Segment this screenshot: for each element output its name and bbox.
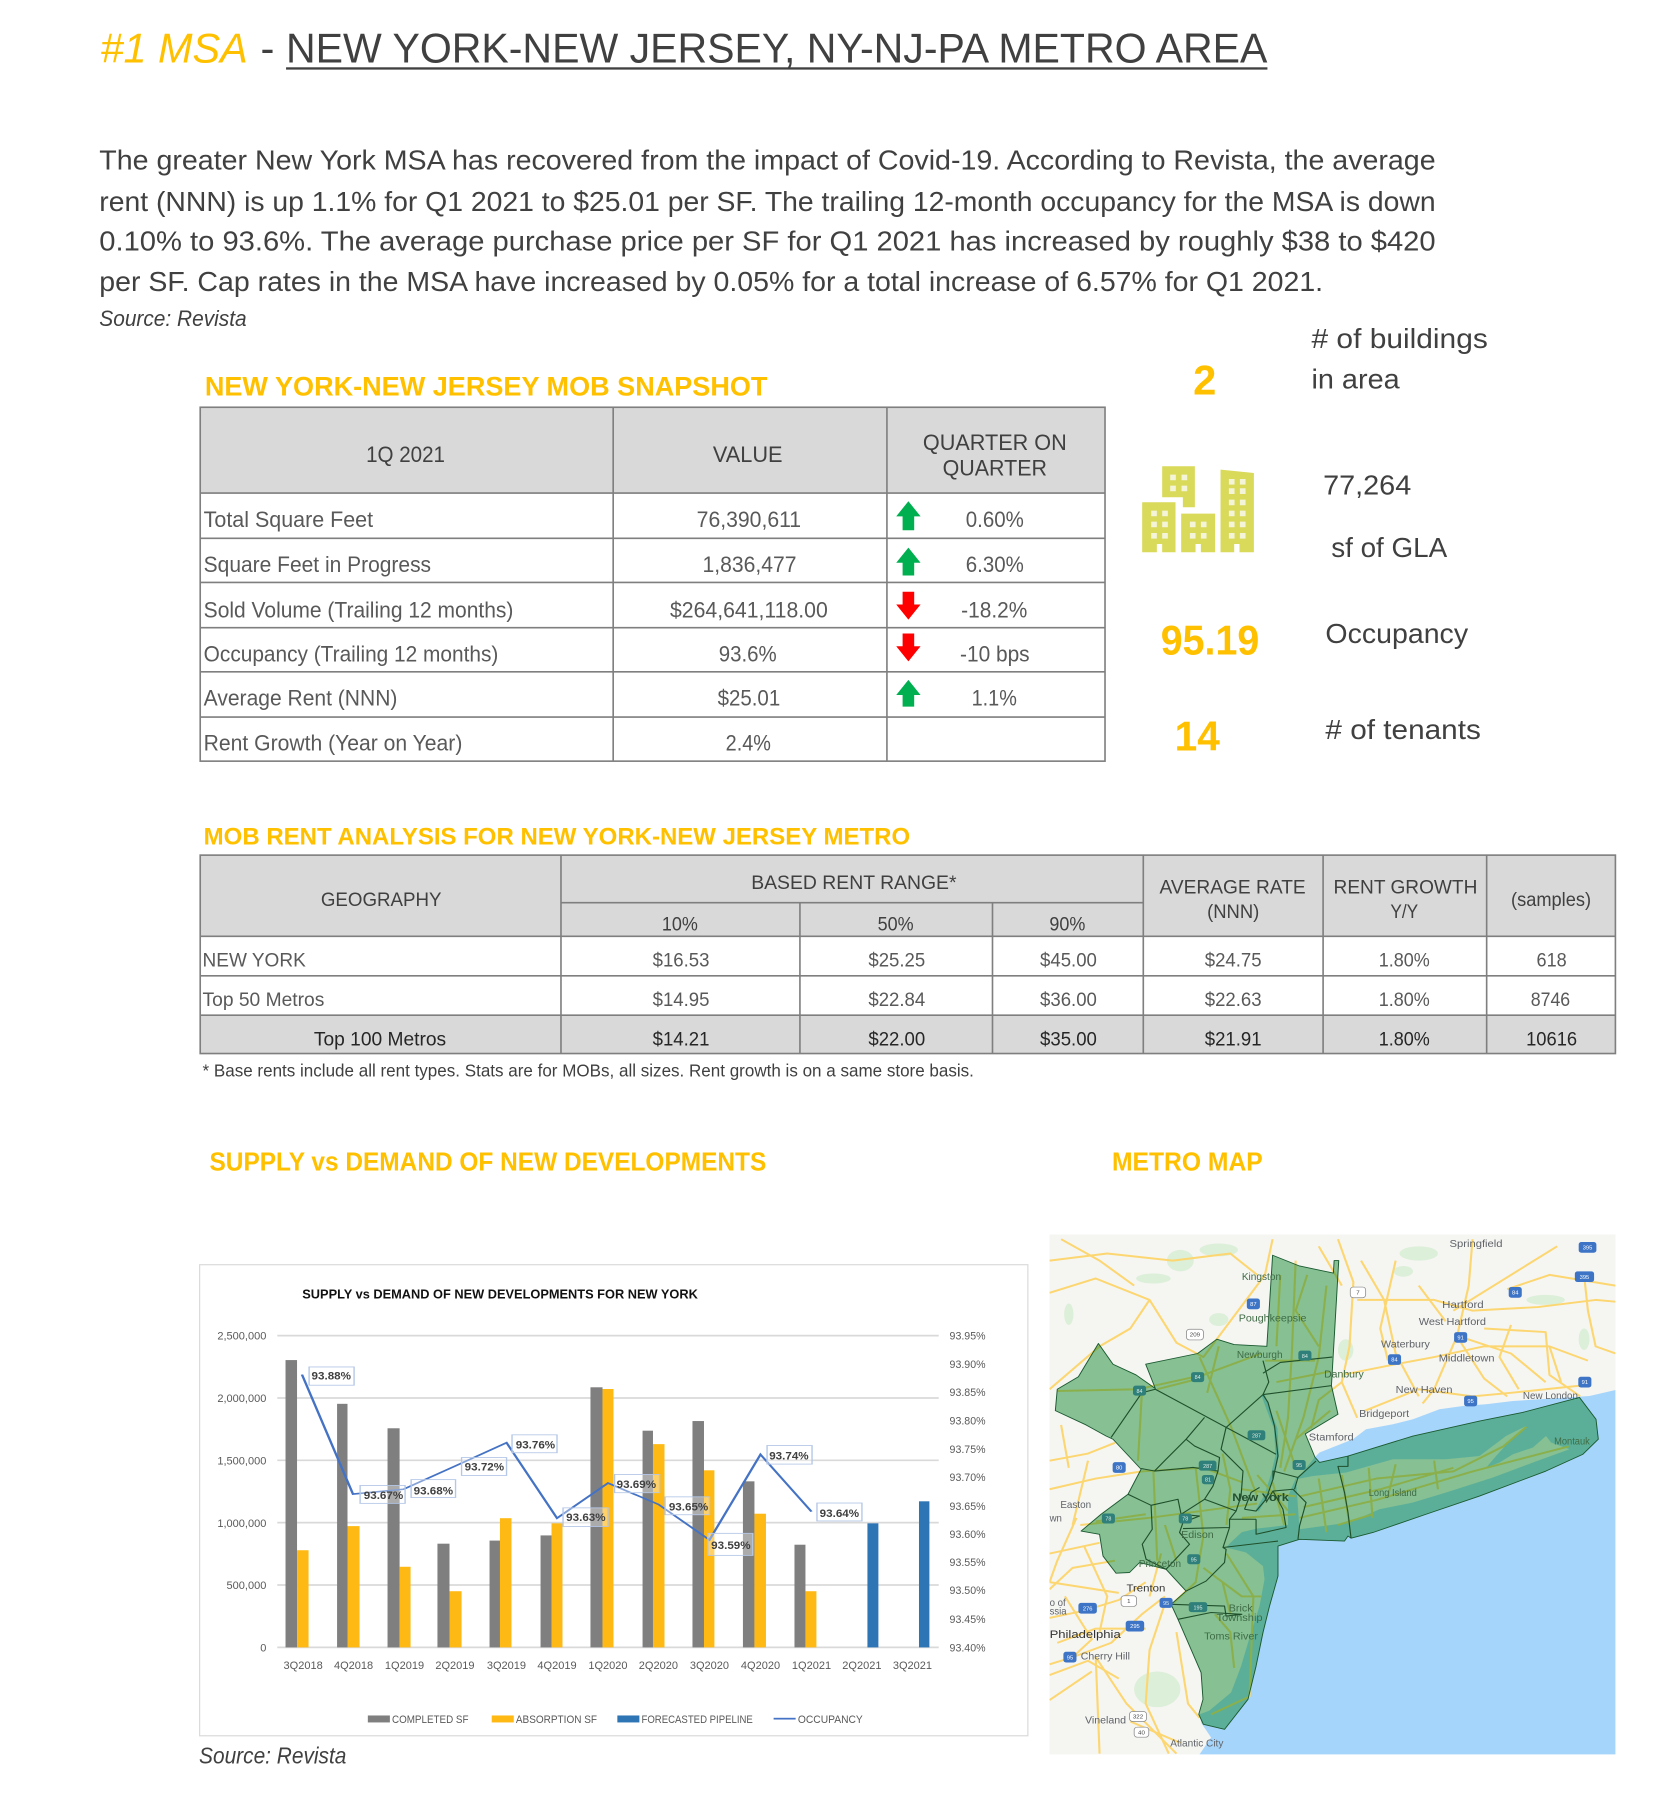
map labels outside the metro area (1049, 1239, 1578, 1749)
metro shields: 84 (1137, 1389, 1143, 1395)
icon: up arrow average rent (896, 680, 921, 707)
metro labels: Newburgh (1237, 1350, 1283, 1361)
metro map (1049, 1232, 1619, 1757)
rent analysis table: $24.75 (1205, 950, 1262, 972)
right axis labels: 93.45% (950, 1614, 986, 1626)
snapshot table: 1Q 2021 (366, 442, 445, 467)
metro labels: Poughkeepsie (1239, 1314, 1307, 1324)
occupancy data labels: 93.67% (364, 1490, 403, 1502)
map labels outside the metro area: Easton (1060, 1500, 1091, 1511)
stat: tenants: 14 (1175, 713, 1220, 760)
heading: snapshot: NEW YORK-NEW JERSEY MOB SNAPSHOT (205, 372, 767, 402)
heading: metro map: METRO MAP (1112, 1149, 1263, 1177)
rent analysis table: RENT GROWTH (1334, 876, 1477, 898)
icon: up arrow square feet in progress (896, 548, 921, 575)
map labels outside the metro area: West Hartford (1419, 1317, 1486, 1328)
metro labels: Edison (1181, 1530, 1214, 1541)
heading: rent analysis: MOB RENT ANALYSIS FOR NEW YORK-NEW JERSEY METRO (204, 824, 910, 851)
rent analysis table: 618 (1537, 950, 1567, 972)
right axis labels: 93.50% (950, 1585, 986, 1597)
stat: occupancy: 95.19 (1161, 616, 1259, 663)
metro shields: 287 (1203, 1464, 1212, 1470)
stat: occupancy (1161, 616, 1468, 663)
left axis labels: 1,500,000 (217, 1455, 266, 1467)
intro paragraph (99, 144, 1436, 297)
metro labels: Princeton (1139, 1559, 1181, 1570)
rent analysis table: 1.80% (1379, 1028, 1430, 1050)
right axis labels: 93.85% (950, 1387, 986, 1399)
metro county boundaries (1111, 1357, 1351, 1619)
rent analysis table: NEW YORK (203, 950, 306, 972)
snapshot table: 93.6% (719, 641, 777, 666)
stat: buildings (1193, 323, 1488, 403)
stat: GLA: 77,264 (1323, 469, 1411, 500)
icon: up arrow total square feet (896, 501, 921, 530)
snapshot table: $264,641,118.00 (670, 597, 828, 622)
map labels outside the metro area: ssia (1050, 1607, 1067, 1617)
icon: buildings (1142, 466, 1254, 552)
snapshot table: QUARTER ON (923, 430, 1067, 455)
intro paragraph: rent (NNN) is up 1.1% for Q1 2021 to $25.01 per SF. The trailing 12-month occupancy for the MSA is down (99, 186, 1436, 217)
rent analysis table: 90% (1049, 914, 1085, 936)
map shields: interstate markers: 1 (1127, 1599, 1130, 1605)
metro labels: Kingston (1242, 1272, 1281, 1283)
rent analysis table: BASED RENT RANGE* (751, 872, 957, 894)
metro shields: 84 (1195, 1375, 1201, 1381)
rent analysis table: Top 50 Metros (203, 989, 324, 1011)
chart title: SUPPLY vs DEMAND OF NEW DEVELOPMENTS FOR NEW YORK (302, 1286, 699, 1301)
snapshot table: Square Feet in Progress (204, 552, 431, 577)
metro shields: 95 (1191, 1558, 1197, 1563)
stat: tenants: # of tenants (1325, 714, 1481, 745)
snapshot table: Rent Growth (Year on Year) (204, 731, 462, 756)
metro shields: 78 (1182, 1517, 1188, 1523)
title: NEW YORK-NEW JERSEY, NY-NJ-PA METRO AREA (286, 25, 1268, 72)
map labels outside the metro area: Waterbury (1381, 1340, 1431, 1350)
chart legend: ABSORPTION SF (516, 1714, 597, 1726)
snapshot table: Total Square Feet (204, 507, 373, 532)
map labels outside the metro area: Cherry Hill (1081, 1652, 1130, 1663)
rent analysis table: $16.53 (653, 950, 709, 972)
occupancy data labels: 93.63% (566, 1512, 606, 1524)
intro paragraph: per SF. Cap rates in the MSA have increased by 0.05% for a total increase of 6.57% for Q1 2021. (99, 266, 1323, 297)
map labels outside the metro area: Springfield (1449, 1239, 1503, 1250)
stat: buildings: 2 (1193, 356, 1216, 403)
stat: buildings: in area (1311, 364, 1400, 395)
metro shields: 287 (1252, 1434, 1261, 1439)
metro roads (1265, 1261, 1330, 1471)
metro shields: 195 (1194, 1605, 1203, 1611)
metro labels: Long Island (1369, 1488, 1417, 1499)
right axis labels: 93.55% (950, 1557, 986, 1569)
chart legend: OCCUPANCY (798, 1714, 863, 1726)
rent analysis table: (samples) (1511, 889, 1591, 911)
map roads (1050, 1239, 1616, 1754)
left axis labels: 0 (260, 1643, 266, 1655)
stat: GLA: sf of GLA (1331, 532, 1448, 563)
metro labels: Montauk (1554, 1437, 1591, 1447)
rent analysis table: $36.00 (1040, 989, 1097, 1011)
rent analysis table: $21.91 (1205, 1028, 1262, 1050)
occupancy data labels: 93.59% (711, 1540, 751, 1552)
intro paragraph: 0.10% to 93.6%. The average purchase price per SF for Q1 2021 has increased by roughly $38 to $420 (99, 226, 1436, 257)
right axis labels: 93.80% (950, 1415, 986, 1427)
plot: gridlines and bars (277, 1336, 939, 1647)
map labels outside the metro area: Bridgeport (1359, 1409, 1409, 1420)
x axis labels: 4Q2018 (334, 1660, 373, 1672)
right axis labels: 93.70% (950, 1472, 986, 1484)
metro shields: 81 (1205, 1478, 1211, 1483)
x axis labels: 1Q2020 (588, 1660, 628, 1672)
map shields: interstate markers: 209 (1190, 1333, 1201, 1339)
map labels outside the metro area: New Haven (1396, 1385, 1453, 1396)
heading: supply vs demand: SUPPLY vs DEMAND OF NEW DEVELOPMENTS (209, 1149, 766, 1177)
map shields: interstate markers: 7 (1356, 1291, 1360, 1296)
x axis labels: 2Q2021 (842, 1660, 881, 1672)
metro shields: 84 (1302, 1354, 1308, 1360)
map labels outside the metro area: Atlantic City (1170, 1739, 1224, 1749)
metro labels: New York (1232, 1490, 1289, 1504)
snapshot table: 6.30% (966, 552, 1024, 577)
title: - (261, 25, 274, 72)
rent analysis table: $22.63 (1205, 989, 1262, 1011)
metro labels: Township (1216, 1613, 1263, 1624)
rent analysis table: $35.00 (1040, 1028, 1097, 1050)
x axis labels: 2Q2020 (639, 1660, 678, 1672)
metro labels (1139, 1272, 1591, 1642)
rent analysis table: $22.00 (868, 1028, 925, 1050)
snapshot table: $25.01 (718, 685, 780, 710)
chart legend: FORECASTED PIPELINE (641, 1714, 753, 1726)
map labels outside the metro area: wn (1049, 1514, 1062, 1524)
map shields: interstate markers: 395 (1583, 1246, 1592, 1251)
stat: GLA (1323, 469, 1448, 563)
snapshot table: 1,836,477 (702, 552, 796, 577)
map shields: interstate markers: 395 (1580, 1275, 1589, 1281)
snapshot table: QUARTER (943, 456, 1047, 481)
occupancy data labels: 93.64% (820, 1508, 859, 1520)
map labels outside the metro area: o of (1050, 1598, 1066, 1609)
left axis labels (217, 1331, 266, 1655)
occupancy data labels: 93.88% (312, 1371, 351, 1383)
metro shields (1102, 1351, 1311, 1612)
map shields: interstate markers: 80 (1116, 1466, 1122, 1472)
occupancy data labels: 93.74% (769, 1451, 809, 1463)
rent analysis table: GEOGRAPHY (321, 889, 441, 911)
x axis labels: 2Q2019 (435, 1660, 475, 1672)
snapshot table: -10 bps (960, 641, 1030, 666)
rent analysis table: Top 100 Metros (314, 1028, 446, 1050)
map labels outside the metro area: Hartford (1442, 1300, 1484, 1311)
chart legend (368, 1714, 863, 1726)
rent analysis table: 50% (878, 914, 914, 936)
source note: Source: Revista (99, 306, 247, 331)
map labels outside the metro area: Trenton (1126, 1584, 1166, 1594)
x axis labels: 3Q2020 (690, 1660, 729, 1672)
snapshot table: 2.4% (726, 731, 771, 756)
occupancy data labels: 93.76% (516, 1440, 555, 1452)
rent analysis table: $14.21 (653, 1028, 709, 1050)
metro shields: 95 (1163, 1601, 1169, 1607)
occupancy data labels: 93.69% (617, 1479, 656, 1491)
rent analysis table: Y/Y (1390, 901, 1418, 923)
x axis labels: 1Q2019 (385, 1660, 424, 1672)
map shields: interstate markers: 95 (1467, 1399, 1474, 1405)
x axis labels: 1Q2021 (792, 1660, 831, 1672)
snapshot table: 1.1% (972, 685, 1017, 710)
left axis labels: 500,000 (227, 1580, 266, 1592)
right axis labels: 93.40% (950, 1642, 986, 1654)
right axis labels: 93.90% (950, 1359, 986, 1371)
icon: down arrow sold volume (896, 592, 921, 620)
x axis labels: 3Q2019 (487, 1660, 526, 1672)
map shields: interstate markers: 91 (1457, 1336, 1464, 1341)
rent analysis table: $25.25 (868, 950, 925, 972)
stat: tenants (1175, 713, 1481, 760)
rent analysis table: 8746 (1531, 989, 1570, 1011)
rent analysis table: $45.00 (1040, 950, 1097, 972)
map shields: interstate markers: 84 (1391, 1358, 1398, 1364)
right axis labels: 93.95% (950, 1331, 986, 1343)
right axis labels: 93.60% (950, 1529, 986, 1541)
metro labels: Brick (1229, 1604, 1254, 1614)
chart legend: COMPLETED SF (392, 1714, 469, 1726)
snapshot table: 0.60% (966, 507, 1024, 532)
title: #1 MSA (100, 25, 248, 72)
map shields: interstate markers: 95 (1067, 1655, 1073, 1661)
stat: occupancy: Occupancy (1325, 618, 1468, 649)
table footnote: * Base rents include all rent types. Stats are for MOBs, all sizes. Rent growth is on a same store basis. (203, 1061, 974, 1081)
left axis labels: 1,000,000 (217, 1518, 266, 1530)
chart source note: Source: Revista (199, 1743, 346, 1769)
x axis labels: 3Q2021 (893, 1660, 932, 1672)
x axis labels: 4Q2020 (741, 1660, 780, 1672)
rent analysis table: 10616 (1526, 1028, 1577, 1050)
map labels outside the metro area: Stamford (1309, 1433, 1354, 1443)
occupancy data labels: 93.72% (465, 1462, 504, 1474)
map shields: interstate markers (1063, 1242, 1596, 1737)
occupancy line (302, 1367, 862, 1555)
map shields: interstate markers: 91 (1582, 1380, 1588, 1386)
metro labels: Danbury (1324, 1370, 1364, 1380)
snapshot table: Average Rent (NNN) (204, 685, 397, 710)
map shields: interstate markers: 295 (1130, 1624, 1140, 1630)
metro labels: Toms River (1204, 1632, 1259, 1642)
rent analysis table: 1.80% (1379, 950, 1430, 972)
icon: down arrow occupancy (896, 634, 921, 661)
occupancy data labels (312, 1371, 859, 1552)
intro paragraph: The greater New York MSA has recovered from the impact of Covid-19. According to Revista, the average (99, 144, 1436, 175)
map shields: interstate markers: 322 (1133, 1715, 1143, 1721)
left axis labels: 2,500,000 (217, 1331, 266, 1343)
stat: buildings: # of buildings (1311, 323, 1488, 354)
occupancy data labels: 93.68% (414, 1485, 453, 1497)
occupancy data labels: 93.65% (669, 1502, 708, 1514)
map labels outside the metro area: Philadelphia (1050, 1628, 1121, 1641)
right axis labels: 93.75% (950, 1444, 986, 1456)
snapshot table: -18.2% (961, 597, 1027, 622)
rent analysis table: 1.80% (1379, 989, 1430, 1011)
x axis labels (284, 1660, 932, 1672)
chart: supply vs demand (200, 1265, 1028, 1736)
x axis labels: 3Q2018 (284, 1660, 323, 1672)
x axis labels: 4Q2019 (537, 1660, 577, 1672)
left axis labels: 2,000,000 (217, 1393, 266, 1405)
map labels outside the metro area: Middletown (1439, 1354, 1495, 1365)
right axis labels: 93.65% (950, 1501, 986, 1513)
snapshot table (200, 407, 1105, 761)
metro area polygon (1055, 1255, 1598, 1729)
snapshot table: VALUE (713, 442, 783, 467)
metro shields: 95 (1296, 1463, 1302, 1469)
map base: land and ocean (1050, 1232, 1619, 1757)
rent analysis table (200, 855, 1615, 1054)
metro shields: 78 (1105, 1517, 1112, 1523)
map shields: interstate markers: 276 (1083, 1607, 1092, 1612)
rent analysis table: (NNN) (1207, 901, 1259, 923)
rent analysis table: $22.84 (868, 989, 925, 1011)
map shields: interstate markers: 87 (1250, 1302, 1257, 1308)
rent analysis table: $14.95 (653, 989, 709, 1011)
snapshot table: Sold Volume (Trailing 12 months) (204, 597, 513, 622)
map labels outside the metro area: Vineland (1085, 1716, 1126, 1726)
snapshot table: 76,390,611 (697, 507, 801, 532)
right axis labels (950, 1331, 986, 1654)
map shields: interstate markers: 40 (1138, 1730, 1146, 1736)
map labels outside the metro area: New London (1523, 1392, 1578, 1402)
rent analysis table: AVERAGE RATE (1160, 876, 1306, 898)
map shields: interstate markers: 84 (1512, 1291, 1518, 1296)
rent analysis table: 10% (662, 914, 698, 936)
snapshot table: Occupancy (Trailing 12 months) (204, 641, 498, 666)
